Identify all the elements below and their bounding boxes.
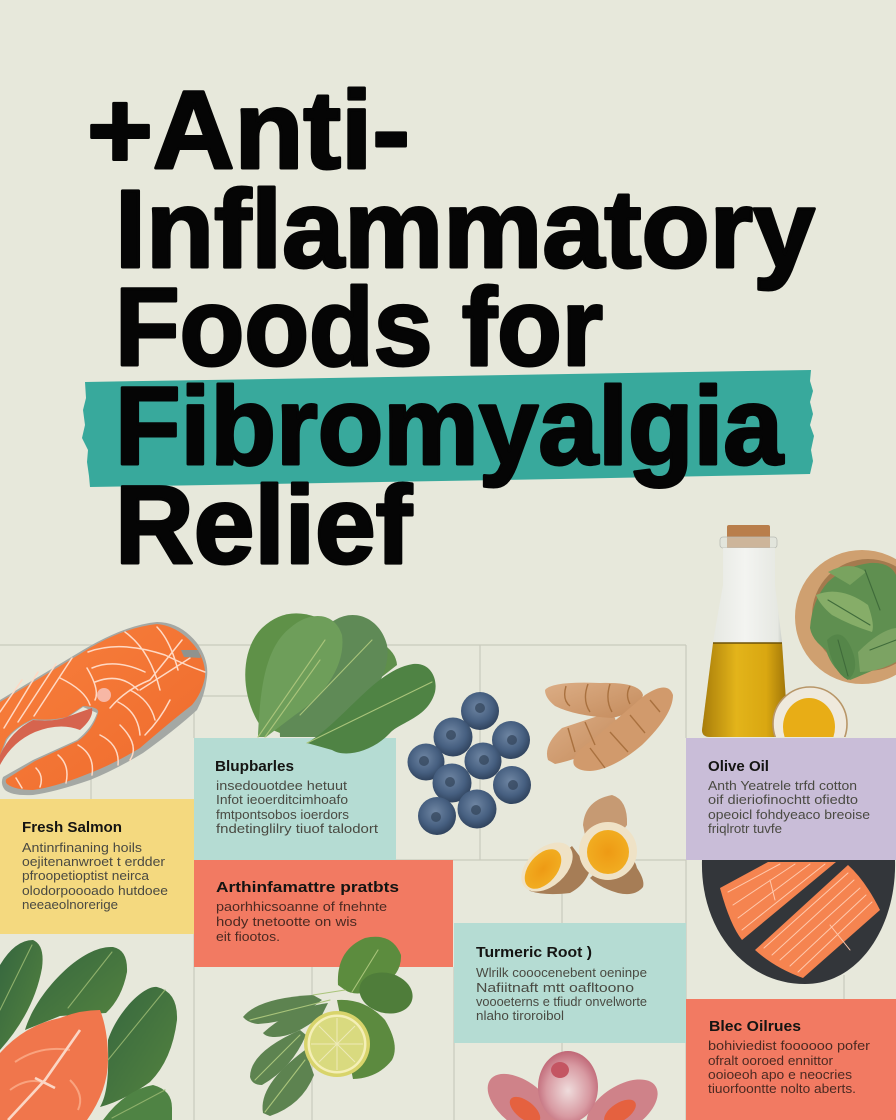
text: fresh salmon body: Antinrfinaning hoils bbox=[22, 841, 142, 855]
panel: olive oil bbox=[686, 738, 896, 860]
heading: blec oilrues: Blec Oilrues bbox=[709, 1019, 801, 1035]
title: Foods for bbox=[115, 266, 603, 389]
text: fresh salmon body: pfroopetioptist neirca bbox=[22, 869, 149, 883]
text: products body bbox=[216, 900, 387, 944]
illustration: pink fruit slices bbox=[477, 1051, 668, 1120]
text: olive oil body bbox=[708, 779, 870, 836]
illustration: salmon fillets in pan bbox=[702, 860, 895, 984]
illustration: lime and leaves bbox=[243, 937, 417, 1116]
heading: turmeric root: Turmeric Root ) bbox=[476, 945, 592, 961]
heading: olive oil: Olive Oil bbox=[708, 759, 769, 775]
illustration: salmon and leaves, bottom left bbox=[0, 940, 177, 1120]
text: products body: eit fiootos. bbox=[216, 930, 280, 944]
heading: anti-inflammatory products: Arthinfamattre pratbts bbox=[216, 880, 399, 896]
title: +Anti- bbox=[87, 69, 410, 192]
text: turmeric body: Wlrilk cooocenebent oeninpe bbox=[476, 966, 647, 980]
title: Relief bbox=[115, 464, 412, 587]
text: blec oilrues body: ooioeoh apo e neocries bbox=[708, 1068, 852, 1082]
illustration: spinach leaves bbox=[245, 613, 436, 753]
heading: fresh salmon: Fresh Salmon bbox=[22, 820, 122, 836]
text: turmeric body: Nafiitnaft mtt oafltoono bbox=[476, 981, 634, 995]
text: blueberries body bbox=[216, 779, 379, 836]
text: turmeric body: nlaho tiroroibol bbox=[476, 1009, 564, 1023]
illustration: turmeric root pieces bbox=[545, 683, 673, 771]
text: blueberries body: fmtpontsobos ioerdors bbox=[216, 808, 349, 822]
text: blueberries body: Infot ieoerditcimhoafo bbox=[216, 793, 348, 807]
text: blec oilrues body: ofralt ooroed ennittor bbox=[708, 1054, 833, 1068]
text: products body: hody tnetootte on wis bbox=[216, 915, 357, 929]
title highlight band bbox=[82, 370, 814, 487]
text: fresh salmon body bbox=[22, 841, 168, 912]
panel: anti-inflammatory products bbox=[194, 860, 453, 967]
illustration: oil dip bowl bbox=[772, 686, 848, 737]
text: blec oilrues body: tiuorfoontte nolto aberts. bbox=[708, 1082, 856, 1096]
text: fresh salmon body: neeaeolnorerige bbox=[22, 898, 118, 912]
text: turmeric body bbox=[476, 966, 647, 1023]
panel: fresh salmon bbox=[0, 799, 194, 934]
text: blueberries body: insedouotdee hetuut bbox=[216, 779, 348, 793]
text: fresh salmon body: olodorpoooado hutdoee bbox=[22, 884, 168, 898]
illustration: salmon steak bbox=[0, 622, 207, 795]
panel: blueberries bbox=[194, 738, 396, 860]
text: blec oilrues body: bohiviedist foooooo pofer bbox=[708, 1039, 870, 1053]
illustration: blueberries bbox=[408, 692, 531, 835]
text: olive oil body: oif dieriofinochtt ofiedto bbox=[708, 793, 858, 807]
title: Fibromyalgia bbox=[115, 365, 784, 488]
text: blec oilrues body bbox=[708, 1039, 870, 1096]
text: blueberries body: fndetinglilry tiuof talodort bbox=[216, 822, 379, 836]
title bbox=[87, 69, 815, 587]
illustration: wooden bowl of greens bbox=[795, 550, 896, 684]
text: fresh salmon body: oejitenanwroet t erdder bbox=[22, 855, 165, 869]
panel: turmeric root bbox=[454, 923, 686, 1043]
text: olive oil body: opeoicl fohdyeaco breoise bbox=[708, 808, 870, 822]
text: olive oil body: friqlrotr tuvfe bbox=[708, 822, 782, 836]
illustration: olive oil bottle bbox=[702, 525, 788, 737]
text: products body: paorhhicsoanne of fnehnte bbox=[216, 900, 387, 914]
title: Inflammatory bbox=[115, 168, 815, 291]
illustration: cut turmeric root bbox=[512, 795, 643, 901]
heading: blueberries: Blupbarles bbox=[215, 759, 294, 775]
text: turmeric body: voooeterns e tfiudr onvelworte bbox=[476, 995, 647, 1009]
panel: blec oilrues bbox=[686, 999, 896, 1120]
text: olive oil body: Anth Yeatrele trfd cotton bbox=[708, 779, 857, 793]
